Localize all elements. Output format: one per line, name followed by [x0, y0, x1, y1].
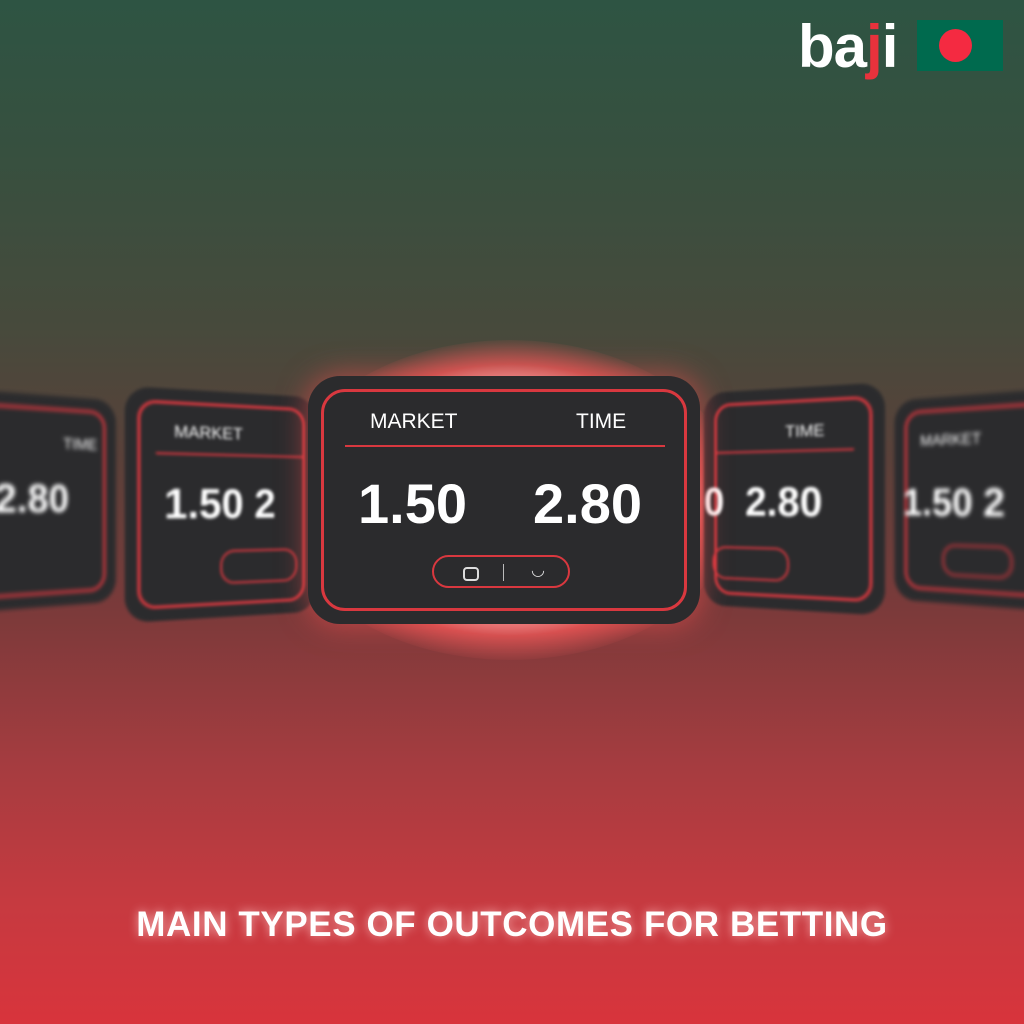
logo: baji: baji	[798, 13, 897, 80]
button pill with icons	[432, 555, 570, 588]
side card: far right: MARKET	[920, 430, 981, 450]
title: MAIN TYPES OF OUTCOMES FOR BETTING	[136, 905, 888, 944]
time label: TIME	[576, 410, 626, 433]
side card: right	[704, 382, 885, 616]
side card: far left	[0, 389, 116, 613]
icon: Bangladesh flag	[917, 20, 1003, 71]
side card: far right: 1.50 2	[903, 481, 1005, 526]
side card: right: TIME	[785, 421, 824, 441]
side card: left: MARKET	[174, 422, 243, 444]
center odds card	[308, 376, 700, 624]
side card: far right	[895, 389, 1024, 611]
button pill with icons: ◡	[531, 562, 545, 579]
glow behind center card	[280, 340, 740, 660]
market label: MARKET	[370, 410, 458, 433]
odds 2.80: 2.80	[533, 472, 642, 535]
side card: right: 0 2.80	[704, 478, 822, 525]
odds 1.50: 1.50	[358, 472, 467, 535]
side card: left	[125, 386, 315, 623]
side card: far left: TIME	[63, 436, 97, 454]
side card: left: 1.50 2	[164, 479, 276, 528]
